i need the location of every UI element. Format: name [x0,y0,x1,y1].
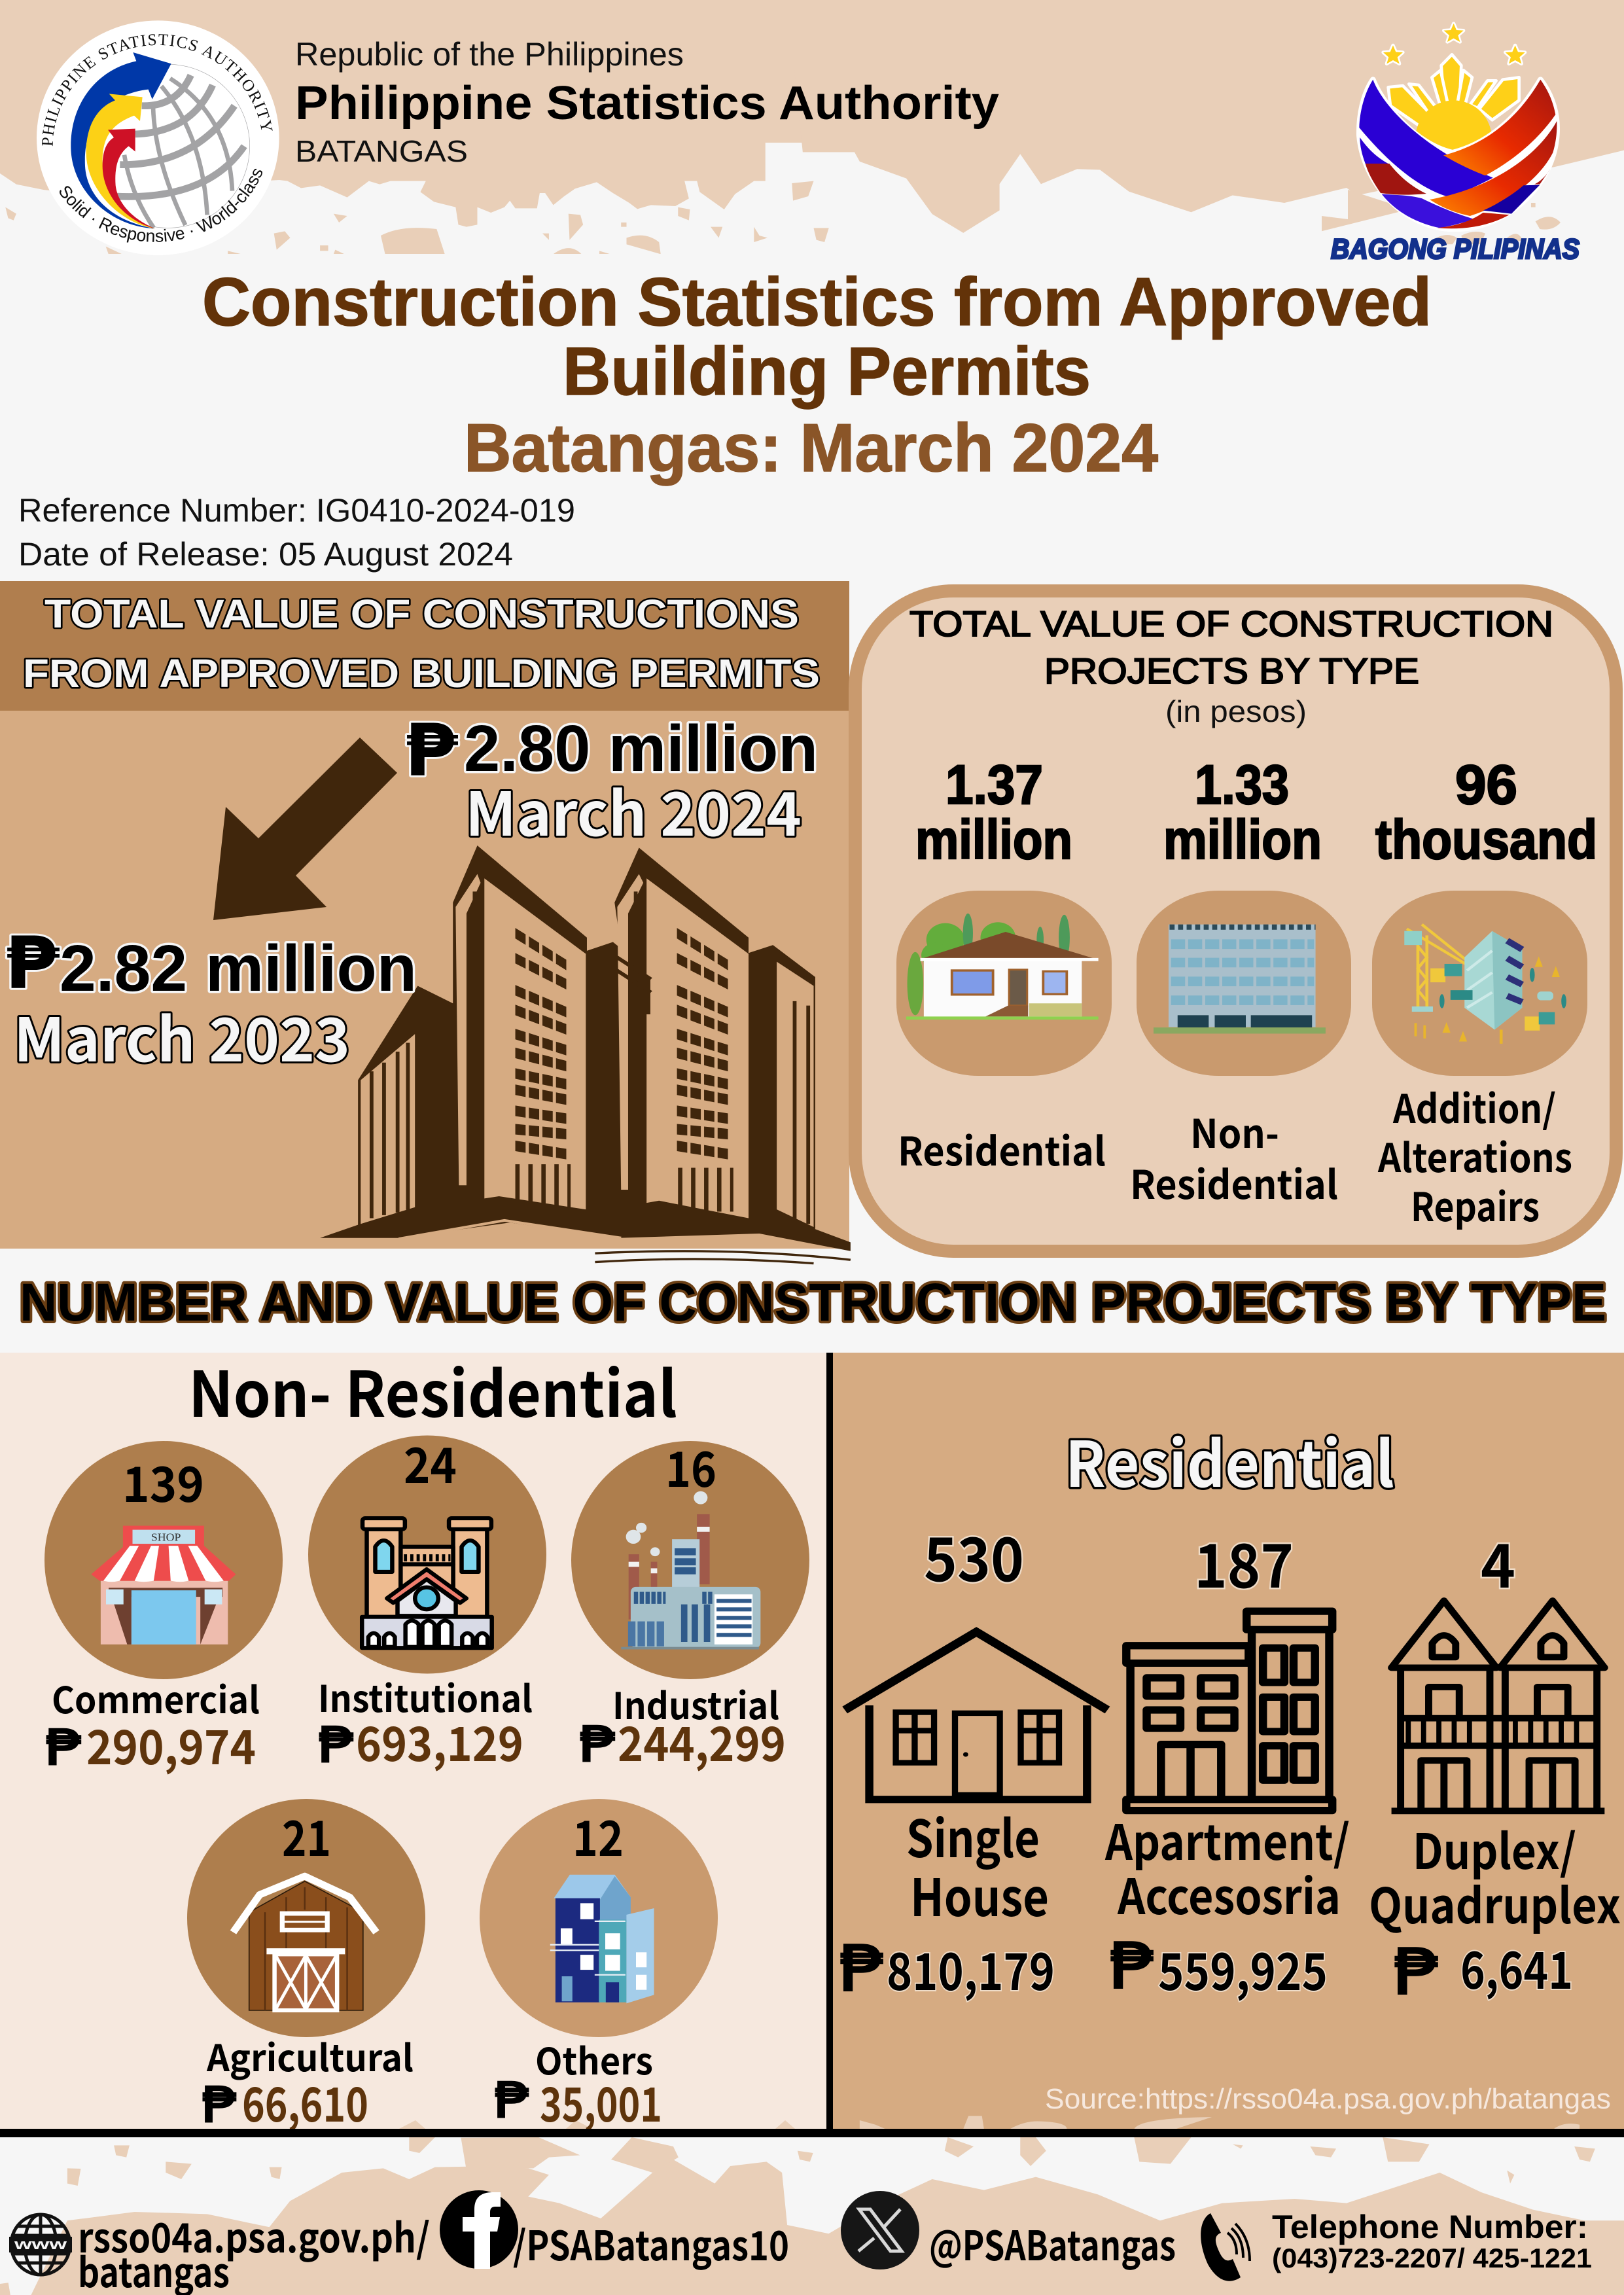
panel title: Non- Residential [188,1344,677,1435]
item: duplex [1369,1518,1621,2009]
logo ring text: Solid · Responsive · World-class [60,169,262,243]
organisation header text [295,36,999,168]
item: commercial: 139 [122,1446,204,1516]
panel drips [860,2116,1580,2129]
values by type: 1.33 [1195,754,1289,815]
icon: globe www [9,2215,72,2275]
item: others: ₱ [494,2073,531,2129]
item: others: 12 [573,1800,624,1870]
type labels: Residential [898,1120,1106,1177]
main title: Construction Statistics from Approved [202,264,1432,340]
item: commercial: ₱ [45,1720,84,1776]
icon: institution building [362,1518,492,1648]
icon: residential house [906,914,1099,1020]
value March 2023: March 2023 [14,992,350,1079]
section heading: NUMBER AND VALUE OF CONSTRUCTION PROJECTS BY TYPE [20,1273,1606,1332]
panel title: Residential [1065,1414,1394,1505]
type labels [898,1078,1572,1233]
stars [1383,24,1525,63]
red wave [1443,80,1555,175]
facebook contact: /PSABatangas10 [513,2213,789,2272]
torn paper footer band [0,2137,1624,2295]
item: industrial [571,1431,809,1775]
blue wave [1359,80,1493,198]
building illustration [320,845,851,1264]
item: agricultural [187,1799,425,2135]
item: industrial: 16 [665,1431,716,1501]
item: apartment: 187 [1194,1518,1294,1605]
panel header [0,581,849,711]
main title [202,264,1432,410]
type labels: Non- [1190,1103,1279,1160]
item: apartment: ₱ [1109,1930,1157,2003]
telephone contact [1201,2209,1592,2281]
blue arrow [71,52,171,228]
type labels: Addition/ [1392,1078,1556,1135]
PSA logo [37,20,279,255]
divider between panels [826,1353,833,2129]
item: apartment [1104,1518,1350,2005]
item: institutional: 24 [404,1427,457,1497]
panel heading [909,603,1553,728]
item: industrial: ₱ [579,1717,618,1773]
icon: factory [621,1491,760,1649]
main title: Building Permits [563,334,1091,410]
type labels: Repairs [1411,1176,1540,1233]
panel: total value of constructions [0,581,851,1264]
reference number and release date: Date of Release: 05 August 2024 [18,536,513,573]
item: others [480,1799,718,2135]
value March 2024: March 2024 [465,766,802,853]
item: agricultural: Agricultural [206,2029,414,2082]
shield outline [1359,80,1557,229]
icon: addition, alteration and repairs construction scene [1404,925,1566,1044]
organisation header text: Republic of the Philippines [295,36,684,73]
item: commercial: 290,974 [86,1709,256,1778]
item: institutional: Institutional [318,1670,533,1723]
X contact [841,2191,1176,2272]
icon tiles [896,891,1587,1076]
item: duplex: 6,641 [1460,1930,1573,2004]
panel heading: (in pesos) [1165,694,1307,728]
item: agricultural: 21 [282,1800,331,1870]
globe [86,64,250,228]
Bagong Pilipinas logo [1359,24,1557,229]
values by type: 1.37 [945,754,1043,815]
panel drips [399,2120,795,2129]
values by type: 96 [1455,754,1517,815]
arrow: decline from 2023 to 2024 [213,738,397,920]
panel heading: PROJECTS BY TYPE [1044,650,1419,691]
logo ring text [42,34,273,243]
item: single house: House [910,1858,1049,1931]
item: apartment: Accesosria [1117,1859,1341,1929]
yellow arrow [86,94,155,228]
item: duplex: ₱ [1393,1936,1441,2009]
item: institutional: 693,129 [356,1706,523,1775]
item: industrial: Industrial [612,1677,779,1730]
organisation header text: BATANGAS [295,134,468,168]
value March 2023: 2.82 million [60,932,417,1005]
values by type: thousand [1375,809,1597,870]
facebook contact [440,2190,789,2272]
icon: shop [91,1526,236,1645]
panel: residential [833,1353,1624,2129]
item: apartment: Apartment/ [1104,1804,1350,1874]
value March 2023: ₱ [5,921,60,1005]
item: others: Others [535,2033,653,2086]
footer rule [0,2129,1624,2137]
red arrow [103,129,155,228]
item: duplex: 4 [1481,1518,1515,1605]
item: single house [839,1512,1108,2006]
item: duplex: Duplex/ [1413,1813,1576,1883]
X contact: @PSABatangas [929,2213,1176,2272]
values by type: million [1163,809,1322,870]
value March 2023 [5,921,417,1079]
icon: globe www: www [13,2236,67,2252]
item: apartment: 559,925 [1158,1932,1328,2005]
icon: duplex outline [1392,1601,1604,1811]
values by type [915,754,1597,870]
panel: value by project type [855,591,1616,1251]
item: agricultural: ₱ [202,2077,239,2133]
icon: apartment outline [1126,1611,1332,1811]
reference number and release date [18,492,575,573]
value March 2024: 2.80 million [464,712,818,785]
type labels: Alterations [1377,1127,1572,1184]
value March 2024: ₱ [404,709,458,792]
values by type: million [915,809,1072,870]
website contact: rsso04a.psa.gov.ph/ [78,2205,430,2264]
item: commercial [44,1441,283,1778]
item: industrial: 244,299 [618,1706,786,1775]
telephone contact: (043)723-2207/ 425-1221 [1272,2243,1592,2273]
source note: Source:https://rsso04a.psa.gov.ph/batangas [1045,2083,1611,2115]
value March 2024 [404,709,818,853]
type labels: Residential [1130,1154,1338,1211]
sun [1388,54,1519,177]
item: single house: ₱ [839,1932,887,2006]
telephone contact: Telephone Number: [1272,2209,1588,2245]
item: single house: 530 [924,1512,1024,1599]
panel header: TOTAL VALUE OF CONSTRUCTIONS [44,592,799,636]
icon: shop: SHOP [151,1531,181,1543]
item: commercial: Commercial [52,1671,260,1724]
Bagong Pilipinas wordmark: BAGONG PILIPINAS [1331,234,1580,265]
panel heading: TOTAL VALUE OF CONSTRUCTION [909,603,1553,644]
logo ring text: PHILIPPINE STATISTICS AUTHORITY [42,34,273,147]
icon: house outline [845,1632,1108,1800]
icon: barn [233,1876,376,2010]
subtitle: Batangas: March 2024 [464,410,1158,486]
item: institutional [308,1427,546,1775]
item: single house: 810,179 [887,1932,1055,2005]
item: agricultural: 66,610 [242,2067,368,2135]
item: single house: Single [906,1799,1040,1872]
reference number and release date: Reference Number: IG0410-2024-019 [18,492,575,529]
icon: non-residential office [1154,925,1326,1033]
panel: non-residential [0,1344,826,2135]
icon: mixed-use building [550,1875,654,2003]
torn paper header band [0,0,1624,254]
panel header: FROM APPROVED BUILDING PERMITS [23,651,820,696]
item: institutional: ₱ [318,1717,356,1773]
item: others: 35,001 [540,2067,662,2135]
website contact [9,2205,430,2295]
organisation header text: Philippine Statistics Authority [295,77,999,130]
